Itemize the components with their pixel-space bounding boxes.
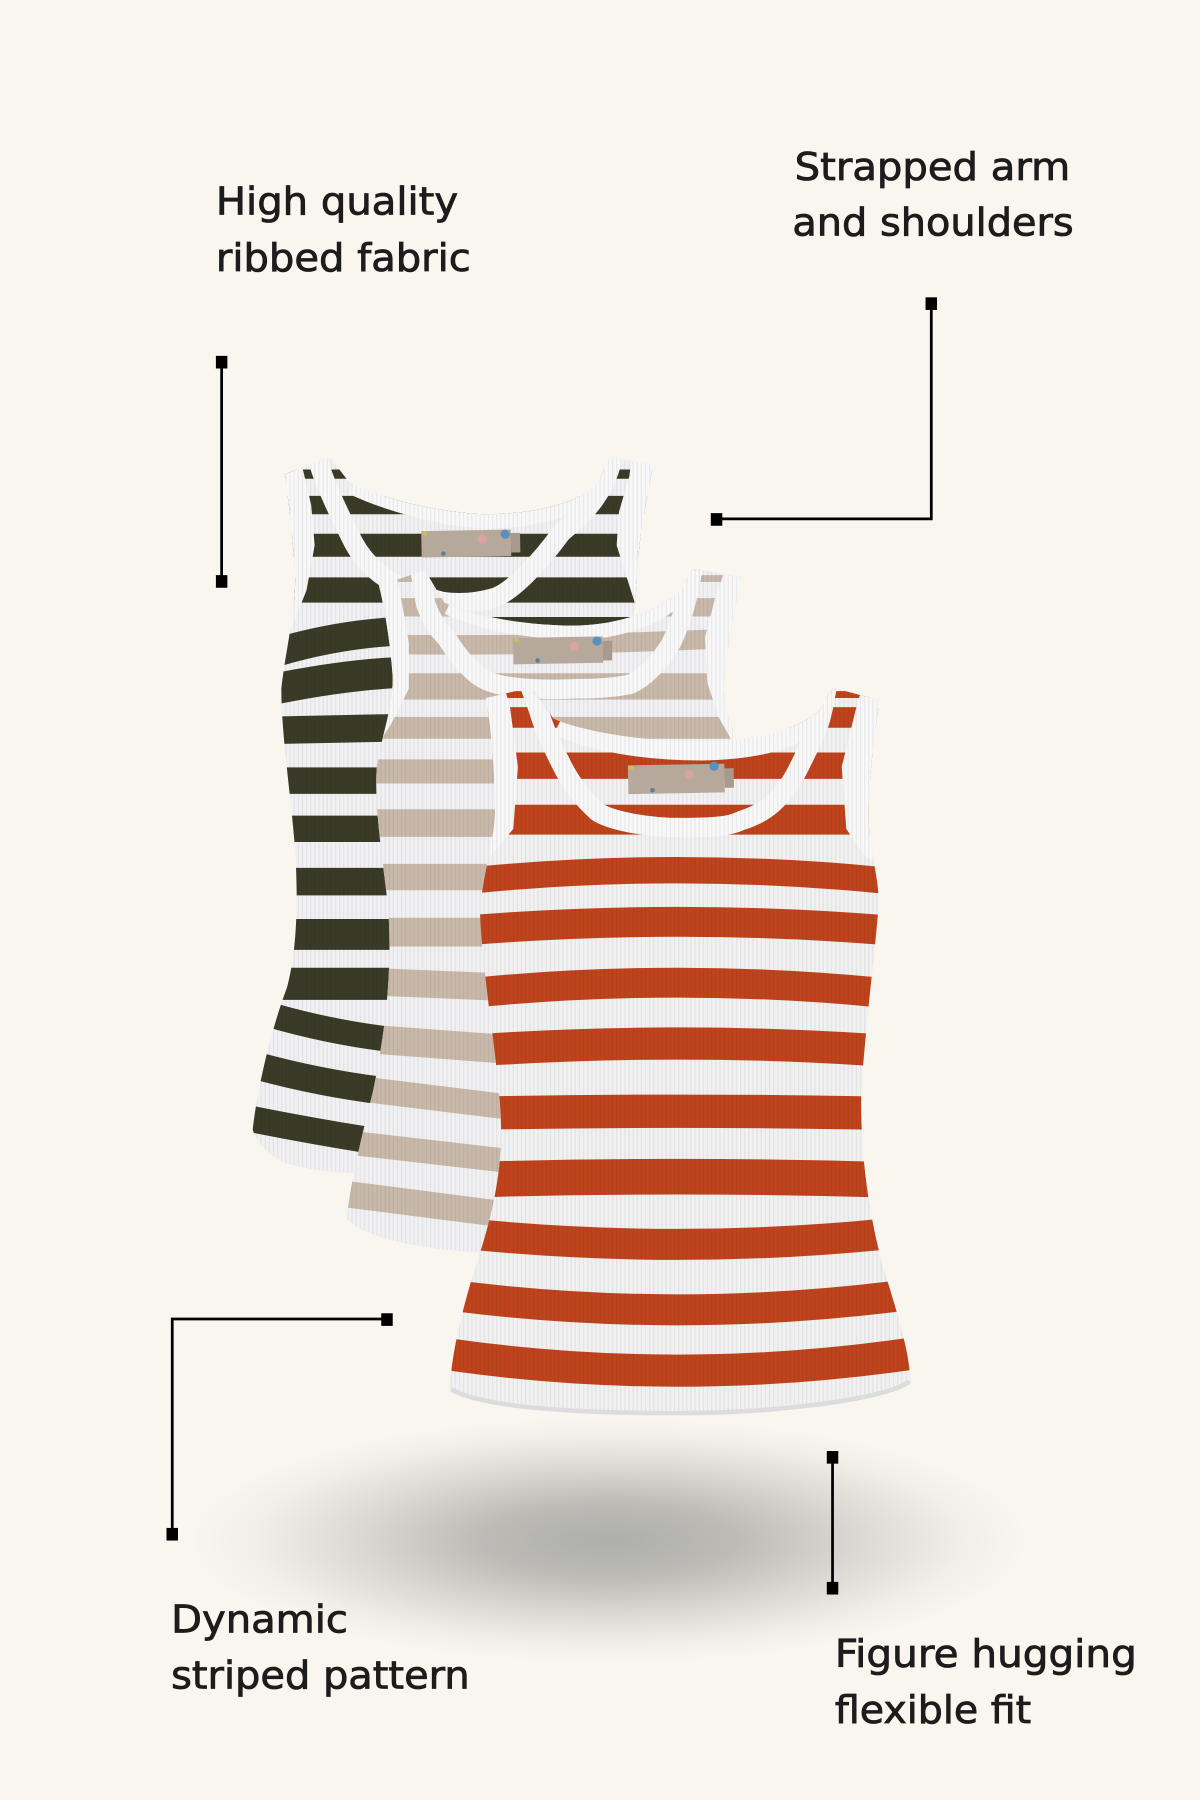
- neck label: red tank: [628, 761, 734, 794]
- callout text: high quality ribbed fabric: ribbed fabric: [216, 236, 471, 281]
- callout text: strapped arm and shoulders: Strapped arm: [795, 145, 1070, 190]
- armhole bands: red tank: [486, 693, 878, 837]
- callout line: straps: [711, 297, 937, 526]
- callout line: stripes: [167, 1313, 393, 1541]
- callout text: figure hugging flexible fit: flexible fit: [835, 1688, 1031, 1733]
- callout text: high quality ribbed fabric: [216, 180, 471, 281]
- callout line: fabric: [216, 356, 227, 588]
- callout text: high quality ribbed fabric: High quality: [216, 180, 458, 225]
- armhole bands: beige tank: [379, 575, 740, 739]
- callout text: strapped arm and shoulders: [792, 145, 1074, 245]
- neck bands: beige tank: [420, 571, 692, 689]
- neck label: beige tank: [513, 636, 612, 664]
- armhole bands: olive tank: [284, 470, 652, 603]
- callout line: fit: [827, 1451, 838, 1595]
- floor shadow: [189, 1418, 1028, 1663]
- callout text: strapped arm and shoulders: and shoulders: [792, 200, 1074, 245]
- tank top: olive striped: [241, 448, 666, 1182]
- callout text: figure hugging flexible fit: Figure hugging: [835, 1632, 1137, 1677]
- neck bands: red tank: [531, 688, 827, 828]
- neck bands: olive tank: [317, 457, 613, 603]
- callout text: figure hugging flexible fit: [835, 1632, 1137, 1733]
- tank top: beige striped: [347, 568, 741, 1252]
- callout text: dynamic striped pattern: striped pattern: [171, 1654, 470, 1699]
- callout text: dynamic striped pattern: Dynamic: [171, 1597, 348, 1642]
- neck label: olive tank: [421, 529, 520, 558]
- tank top: rust red striped: [442, 677, 919, 1423]
- callout text: dynamic striped pattern: [171, 1597, 470, 1699]
